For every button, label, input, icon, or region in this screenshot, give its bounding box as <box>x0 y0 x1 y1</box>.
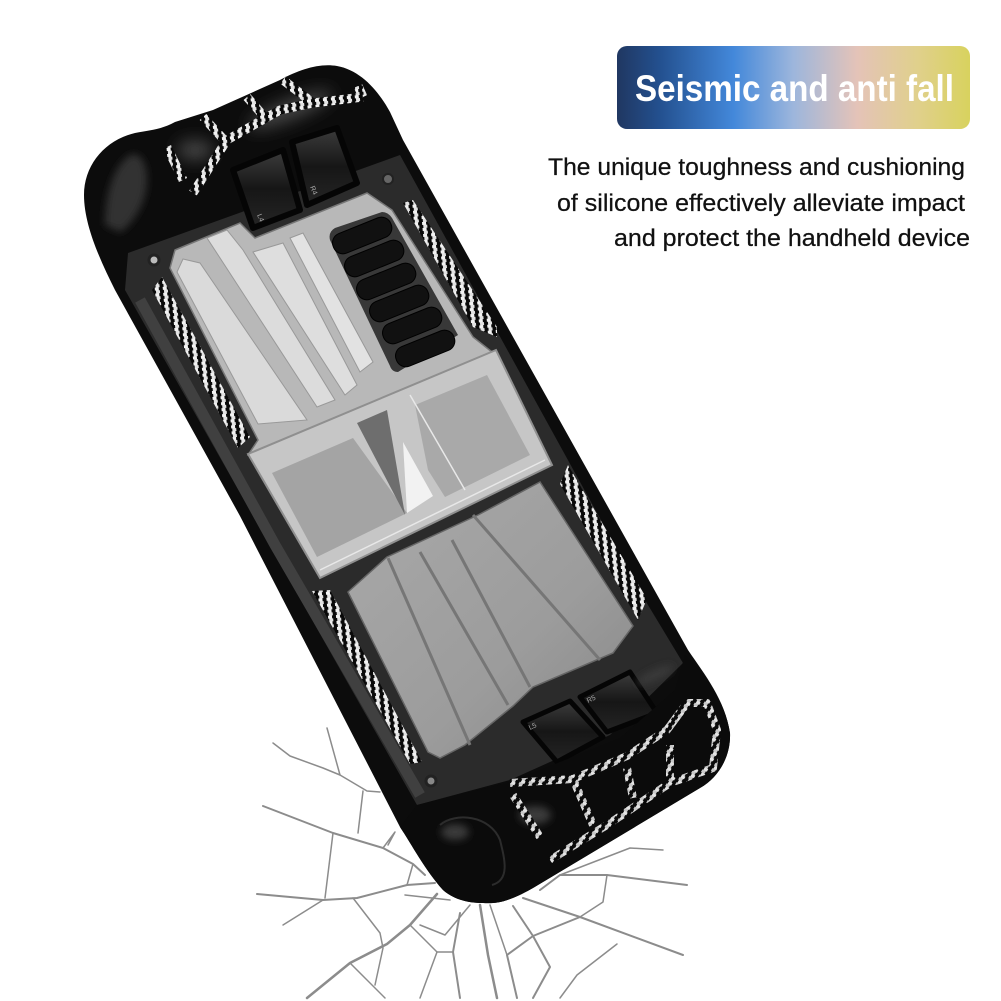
bottom shoulder button left: L5 <box>528 722 538 732</box>
card left window <box>272 438 407 557</box>
game console case <box>84 65 730 903</box>
top shoulder button left: L4 <box>255 213 265 223</box>
banner heading: Seismic and anti fall <box>635 68 954 109</box>
panel insert D <box>290 233 373 372</box>
top grip soft highlights <box>177 84 335 160</box>
screw bottom left <box>426 776 436 786</box>
cracked ground <box>257 728 687 998</box>
left lower carbon strip <box>312 590 422 764</box>
bottom grip dark mass <box>400 655 730 903</box>
right lower carbon strip <box>560 465 647 620</box>
bottom shoulder button right: R5 <box>586 695 597 705</box>
top shoulder button right: R4 <box>308 185 318 196</box>
left frame band <box>140 300 420 795</box>
top grip carbon weave <box>167 80 363 193</box>
title banner <box>617 46 970 129</box>
panel insert C <box>253 243 357 395</box>
bottom grip soft highlights <box>441 662 675 840</box>
panel insert B <box>207 230 335 407</box>
kickstand light wedge <box>403 442 433 513</box>
right upper carbon strip <box>403 200 497 337</box>
bottom grip carbon weave <box>510 703 717 860</box>
left grip contour <box>105 154 147 232</box>
left upper carbon strip <box>152 277 250 448</box>
inner back plate <box>125 155 683 805</box>
upper clear panel <box>170 193 492 470</box>
description text: of silicone effectively alleviate impact <box>557 190 965 217</box>
bottom shoulder button right <box>580 672 657 732</box>
top shoulder button left <box>233 150 300 228</box>
screw top left <box>149 255 159 265</box>
top shoulder button right <box>292 128 357 205</box>
kickstand dark wedge <box>357 410 405 515</box>
clear kickstand card <box>248 350 552 578</box>
screw top right <box>383 174 393 184</box>
analog stick contour <box>440 817 505 885</box>
lower panel ribs <box>388 515 600 745</box>
description text: and protect the handheld device <box>614 225 970 252</box>
description text <box>548 154 970 252</box>
description text: The unique toughness and cushioning <box>548 154 965 181</box>
card highlight edges <box>320 395 545 570</box>
bottom shoulder button left <box>523 701 603 762</box>
lower frosted panel <box>348 482 633 758</box>
vent frame <box>330 212 458 372</box>
case outer silhouette <box>84 65 730 903</box>
card right window <box>415 375 530 497</box>
vent slots <box>330 214 458 370</box>
panel insert A <box>177 259 307 424</box>
